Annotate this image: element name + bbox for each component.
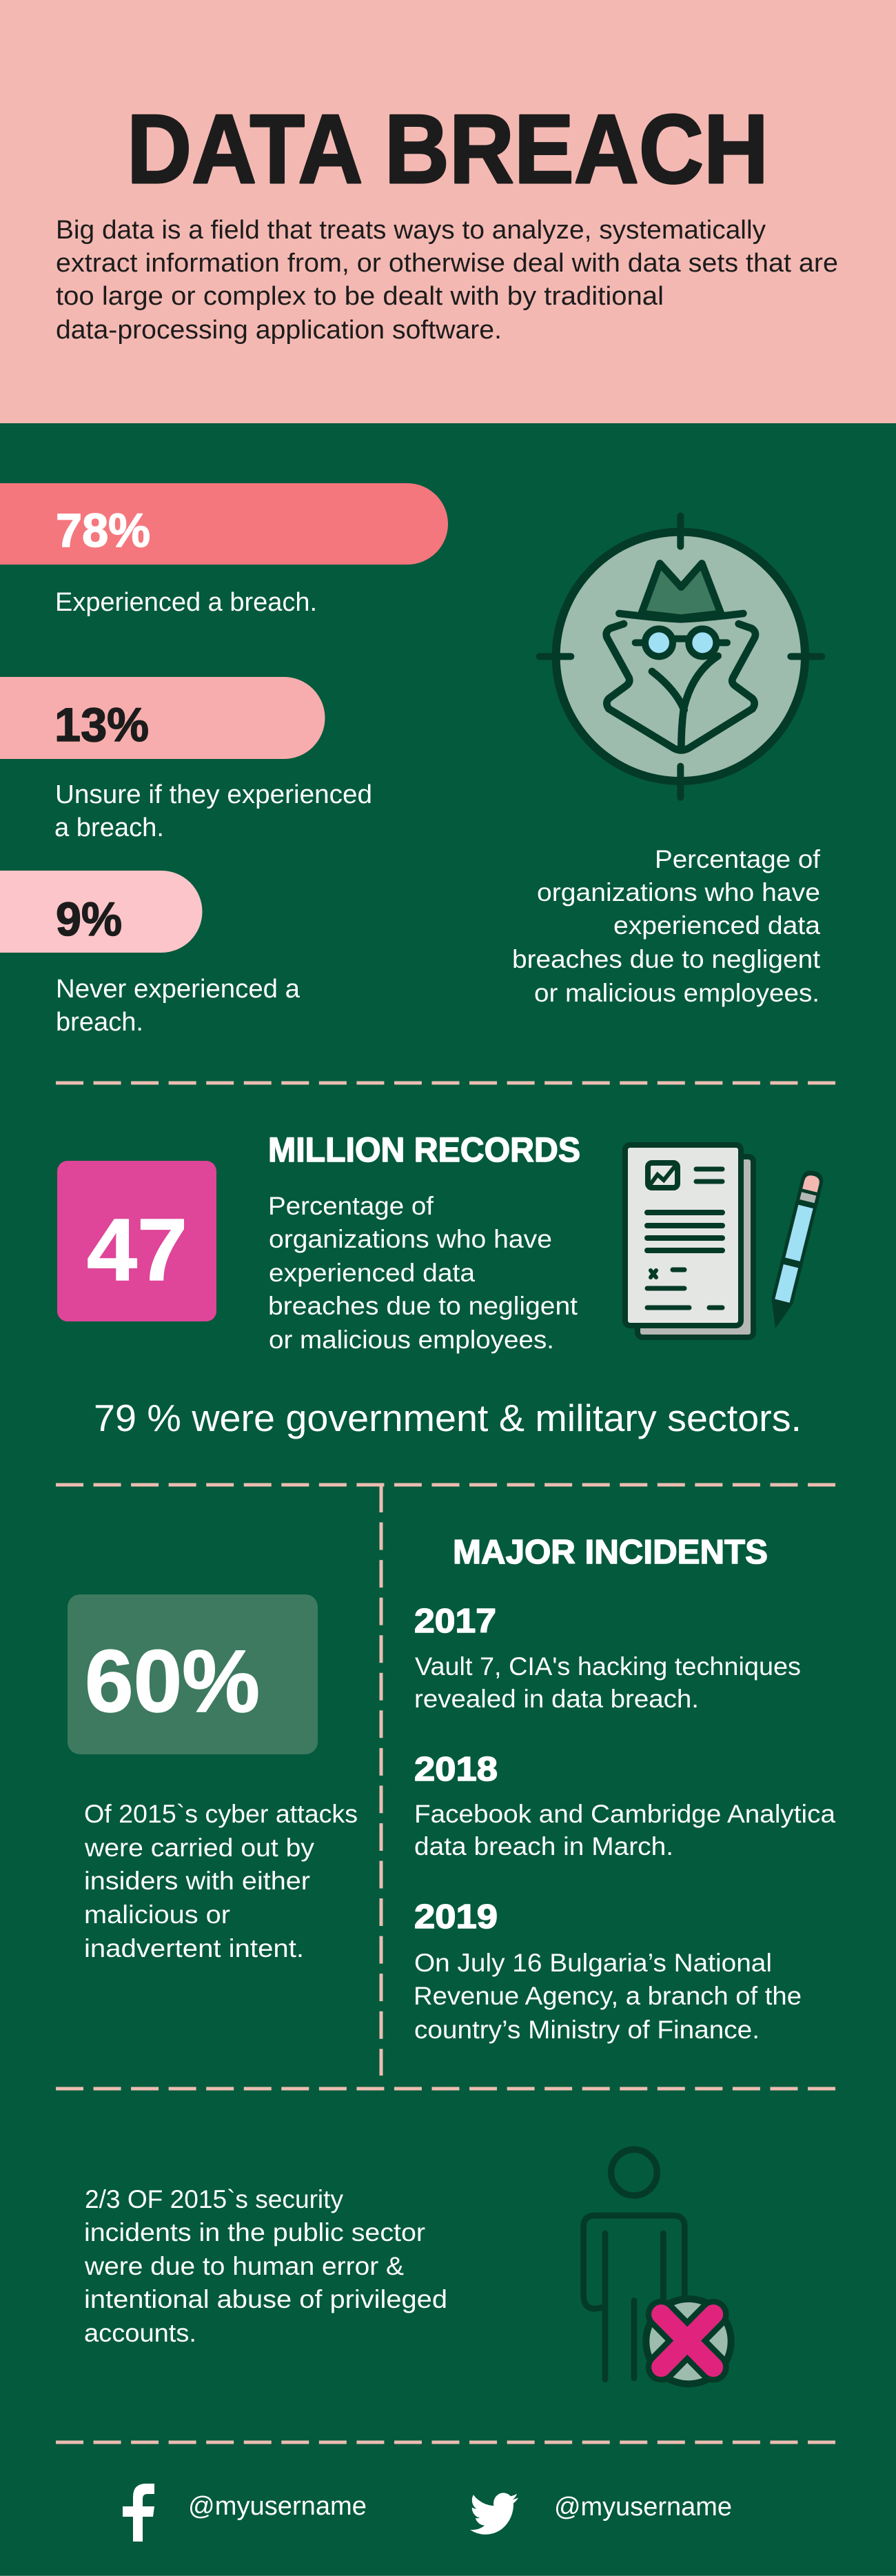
text: cyber attacks: malicious or <box>84 1900 230 1929</box>
label: unsure: a breach. <box>54 813 164 842</box>
text: negligent employees: or malicious employees. <box>534 979 819 1007</box>
text: public sector incidents: intentional abuse of privileged <box>84 2285 447 2313</box>
text: records description: experienced data <box>269 1259 475 1287</box>
icon: facebook <box>123 2484 154 2542</box>
text: records description: organizations who have <box>269 1225 552 1253</box>
label: unsure <box>54 780 372 842</box>
bar: 9%: 9% <box>56 893 122 946</box>
incident: 2018: Facebook and Cambridge Analytica <box>414 1800 835 1828</box>
text: records description: or malicious employees. <box>269 1326 554 1354</box>
badge: 60%: 60% <box>85 1632 260 1731</box>
panel: social footer <box>123 2484 732 2542</box>
text: cyber attacks <box>84 1800 358 1963</box>
label: never <box>56 975 301 1037</box>
incident: 2017: Vault 7, CIA's hacking techniques <box>415 1652 801 1681</box>
intro text <box>56 216 838 345</box>
text: cyber attacks: insiders with either <box>84 1867 310 1895</box>
title: DATA BREACH <box>127 94 768 204</box>
icon: twitter <box>470 2493 518 2535</box>
badge: 47: 47 <box>87 1201 187 1299</box>
incident: 2018: 2018 <box>414 1751 498 1788</box>
incident: 2019 <box>414 1898 802 2044</box>
text: negligent employees: experienced data <box>613 911 820 940</box>
text: cyber attacks: were carried out by <box>84 1834 315 1862</box>
incident: 2018: data breach in March. <box>414 1832 673 1860</box>
bar: 13% <box>0 677 325 759</box>
label: experienced: Experienced a breach. <box>55 588 317 617</box>
panel: header <box>0 0 896 423</box>
intro text: data-processing application software. <box>56 316 502 345</box>
incident: 2019: Revenue Agency, a branch of the <box>414 1982 802 2010</box>
bar: 78%: 78% <box>56 504 150 557</box>
intro text: extract information from, or otherwise deal with data sets that are <box>56 249 838 278</box>
text: records description <box>268 1192 578 1354</box>
facebook handle: @myusername <box>188 2492 367 2521</box>
text: records description: breaches due to negligent <box>268 1292 578 1320</box>
intro text: Big data is a field that treats ways to analyze, systematically <box>56 216 766 245</box>
text: public sector incidents: 2/3 OF 2015`s security <box>85 2185 343 2213</box>
incident: 2019: country’s Ministry of Finance. <box>414 2016 760 2044</box>
text: public sector incidents: were due to human error & <box>84 2252 404 2280</box>
text: records description: Percentage of <box>268 1192 434 1220</box>
icon: pencil <box>764 1168 825 1331</box>
panel: million records <box>57 1130 825 1354</box>
text: public sector incidents: accounts. <box>84 2319 196 2347</box>
badge: 47 <box>57 1161 216 1321</box>
label: never: breach. <box>56 1008 143 1037</box>
panel: major incidents <box>414 1534 835 2044</box>
text: negligent employees: Percentage of <box>655 845 821 873</box>
icon: person with X <box>584 2149 731 2384</box>
icon: detective in crosshair <box>540 516 822 798</box>
incident: 2017: 2017 <box>414 1603 496 1640</box>
heading: major incidents: MAJOR INCIDENTS <box>453 1534 768 1571</box>
icon: document <box>625 1145 753 1337</box>
panel: breach percentages <box>0 483 448 1037</box>
incident: 2017: revealed in data breach. <box>414 1685 699 1713</box>
badge: 60% <box>68 1594 318 1754</box>
text: negligent employees: organizations who have <box>537 878 820 906</box>
text: public sector incidents <box>84 2185 447 2347</box>
label: never: Never experienced a <box>56 975 301 1004</box>
bar: 9% <box>0 871 203 953</box>
text: public sector incidents: incidents in the public sector <box>84 2218 425 2247</box>
panel: 60 percent insiders <box>68 1594 358 1963</box>
label: unsure: Unsure if they experienced <box>55 780 372 809</box>
text: government sectors: 79 % were government & military sectors. <box>94 1397 802 1439</box>
heading: million records: MILLION RECORDS <box>268 1130 580 1169</box>
twitter handle: @myusername <box>554 2493 732 2522</box>
text: cyber attacks: inadvertent intent. <box>84 1934 304 1963</box>
bar: 78% <box>0 483 448 565</box>
incident: 2019: On July 16 Bulgaria’s National <box>414 1949 772 1977</box>
incident: 2017 <box>414 1603 801 1713</box>
bar: 13%: 13% <box>54 698 149 751</box>
text: cyber attacks: Of 2015`s cyber attacks <box>84 1800 358 1828</box>
incident: 2019: 2019 <box>414 1898 498 1936</box>
text: negligent employees: breaches due to negligent <box>512 945 821 973</box>
intro text: too large or complex to be dealt with by traditional <box>56 282 664 311</box>
text: negligent employees <box>512 845 821 1007</box>
incident: 2018 <box>414 1751 835 1860</box>
